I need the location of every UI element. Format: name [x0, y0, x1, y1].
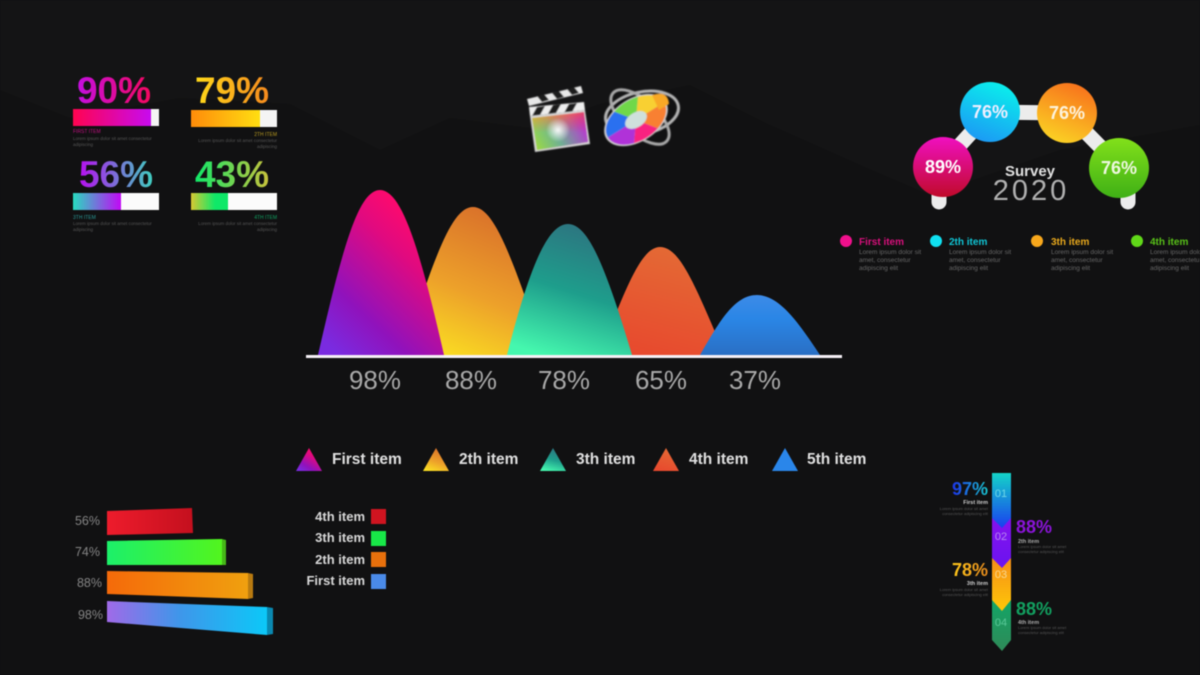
- stat: 79%: 2TH ITEM: [254, 132, 277, 138]
- 3D bar chart: [75, 508, 273, 635]
- survey legend: [840, 235, 1200, 272]
- bar: 98%: 98%: [78, 608, 103, 622]
- stat: 97%: [940, 479, 989, 516]
- item: 4th item: 4th item: [1150, 237, 1188, 248]
- bubble: 76% orange: 76%: [1049, 103, 1085, 123]
- arrow segment 03: [992, 555, 1011, 611]
- stat: 56%: adipiscing: [73, 227, 94, 232]
- bar: 88%: [77, 571, 253, 599]
- stat: 78%: [940, 560, 989, 597]
- stat: 79%: Lorem ipsum dolor sit amet consectetur: [198, 138, 277, 143]
- item: 2th item: [930, 235, 1011, 272]
- arrow segment 04: 04: [995, 617, 1007, 629]
- survey year: 2020: [993, 175, 1069, 207]
- legend: 3th item: 3th item: [315, 530, 365, 545]
- icons: app logos: [526, 85, 681, 153]
- bubble: 76% orange: [1037, 83, 1097, 143]
- item: 3th item: amet, consectetur: [1051, 257, 1103, 264]
- value labels: 88%: [445, 365, 497, 395]
- stat: 43%: 43%: [195, 154, 269, 195]
- stat: 90%: 90%: [77, 70, 151, 111]
- item: 3th item: [1031, 235, 1113, 272]
- stat: 88% green: Lorem ipsum dolor sit amet: [1018, 625, 1067, 630]
- item: 4th item: adipiscing elit: [1150, 265, 1189, 272]
- item: First item: Lorem ipsum dolor sit: [859, 249, 921, 256]
- item: 2th item: Lorem ipsum dolor sit: [949, 249, 1011, 256]
- stat: 79%: [191, 70, 277, 149]
- icon: motion orbit: [595, 80, 683, 157]
- legend item: 5th item: 5th item: [807, 451, 866, 468]
- stat: 90%: FIRST ITEM: [73, 129, 101, 135]
- legend: First item: First item: [306, 573, 365, 588]
- item: 4th item: [1131, 235, 1200, 272]
- legend: 4th item: 4th item: [315, 509, 365, 524]
- stat: 56%: 3TH ITEM: [73, 215, 96, 221]
- stat: 56%: 56%: [79, 154, 153, 195]
- value labels: 65%: [635, 365, 687, 395]
- stat: 97%: consectetur adipiscing elit: [942, 511, 989, 516]
- item: 3th item: Lorem ipsum dolor sit: [1051, 249, 1113, 256]
- panel: survey 2020: [913, 82, 1149, 207]
- chart: bell humps: [306, 190, 842, 395]
- bar: 74%: 74%: [75, 545, 100, 559]
- stat: 43%: Lorem ipsum dolor sit amet consectetur: [198, 221, 277, 226]
- stat: 88% green: 4th item: [1018, 620, 1039, 626]
- hump: 3th item: [507, 224, 632, 355]
- legend item: 4th item: 4th item: [689, 451, 748, 468]
- arrow segment 04: [992, 596, 1011, 651]
- bubble: 76% blue: 76%: [972, 102, 1008, 122]
- stat: 78%: 78%: [952, 560, 988, 580]
- bubble: 89%: [913, 137, 973, 197]
- item: 2th item: adipiscing elit: [949, 265, 988, 272]
- hump: 4th item: [600, 247, 725, 355]
- bar: 74%: [75, 539, 226, 565]
- bubble: 76% green: [1089, 138, 1149, 198]
- arrow segment 01: 01: [995, 488, 1007, 500]
- bar: 56%: 56%: [75, 514, 100, 528]
- legend item: First item: [296, 448, 402, 471]
- stat: 56%: [73, 154, 159, 232]
- icon: clapperboard: [527, 86, 590, 152]
- arrow segment 01: [992, 473, 1011, 528]
- bar chart legend: [306, 509, 386, 589]
- stat: 79%: adipiscing: [257, 144, 277, 149]
- stat: 43%: 4TH ITEM: [254, 215, 277, 221]
- hump: 5th item: [700, 295, 820, 355]
- legend item: 5th item: [772, 448, 866, 471]
- stat: 88% purple: [1016, 517, 1067, 554]
- legend item: 2th item: 2th item: [459, 451, 518, 468]
- item: 2th item: 2th item: [949, 237, 987, 248]
- stat: 78%: Lorem ipsum dolor sit amet: [940, 587, 989, 592]
- item: 3th item: adipiscing elit: [1051, 265, 1090, 272]
- legend item: 3th item: [540, 448, 635, 471]
- stat: 88% purple: Lorem ipsum dolor sit amet: [1018, 544, 1067, 549]
- stat: 88% green: 88%: [1016, 599, 1052, 619]
- stat: 79%: 79%: [195, 70, 269, 111]
- bar: 56%: [75, 508, 193, 535]
- stat: 90%: Lorem ipsum dolor sit amet consectetur: [73, 136, 152, 141]
- legend item: First item: First item: [332, 451, 402, 468]
- panel: vertical arrow timeline: [940, 473, 1067, 651]
- arrow segment 02: 02: [995, 531, 1007, 543]
- legend item: 3th item: 3th item: [576, 451, 635, 468]
- arrow segment 02: [992, 510, 1011, 568]
- stat: 56%: Lorem ipsum dolor sit amet consectetur: [73, 221, 152, 226]
- hump: First item: [318, 190, 444, 355]
- stat: 43%: adipiscing: [257, 227, 277, 232]
- value labels: [349, 365, 781, 395]
- bubble: 76% blue: [960, 82, 1020, 142]
- bar: 88%: 88%: [77, 576, 102, 590]
- stat: 97%: Lorem ipsum dolor sit amet: [940, 506, 989, 511]
- item: First item: adipiscing elit: [859, 265, 898, 272]
- stat: 88% green: [1016, 599, 1067, 635]
- bubble: 76% green: 76%: [1101, 158, 1137, 178]
- legend: 2th item: 2th item: [315, 552, 365, 567]
- chart baseline: [306, 355, 842, 358]
- legend item: 4th item: [653, 448, 748, 471]
- item: First item: First item: [859, 237, 904, 248]
- item: First item: amet, consectetur: [859, 257, 911, 264]
- stat: 88% purple: 88%: [1016, 517, 1052, 537]
- value labels: 98%: [349, 365, 401, 395]
- survey title: Survey: [1005, 163, 1056, 180]
- bar: 98%: [78, 601, 273, 635]
- stat: 43%: [191, 154, 277, 232]
- value labels: 37%: [729, 365, 781, 395]
- stat: 88% purple: consectetur adipiscing elit: [1018, 549, 1065, 554]
- value labels: 78%: [538, 365, 590, 395]
- stat: 90%: adipiscing: [73, 142, 94, 147]
- legend: triangles: [296, 448, 866, 471]
- stat: 97%: 97%: [952, 479, 988, 499]
- item: 3th item: 3th item: [1051, 237, 1089, 248]
- stat: 88% purple: 2th item: [1018, 539, 1039, 545]
- arrow segment 03: 03: [995, 569, 1007, 581]
- bubble: 89%: 89%: [925, 157, 961, 177]
- connector arc: [939, 112, 1128, 202]
- item: 2th item: amet, consectetur: [949, 257, 1001, 264]
- stat: 78%: 3th item: [967, 581, 988, 587]
- item: First item: [840, 235, 921, 272]
- stat: 90%: [73, 70, 159, 147]
- hump: 2th item: [403, 207, 545, 355]
- legend item: 2th item: [423, 448, 518, 471]
- stat: 97%: First item: [963, 500, 988, 506]
- stat: 88% green: consectetur adipiscing elit: [1018, 630, 1065, 635]
- panel: progress bars top left: [73, 70, 277, 232]
- stat: 78%: consectetur adipiscing elit: [942, 592, 989, 597]
